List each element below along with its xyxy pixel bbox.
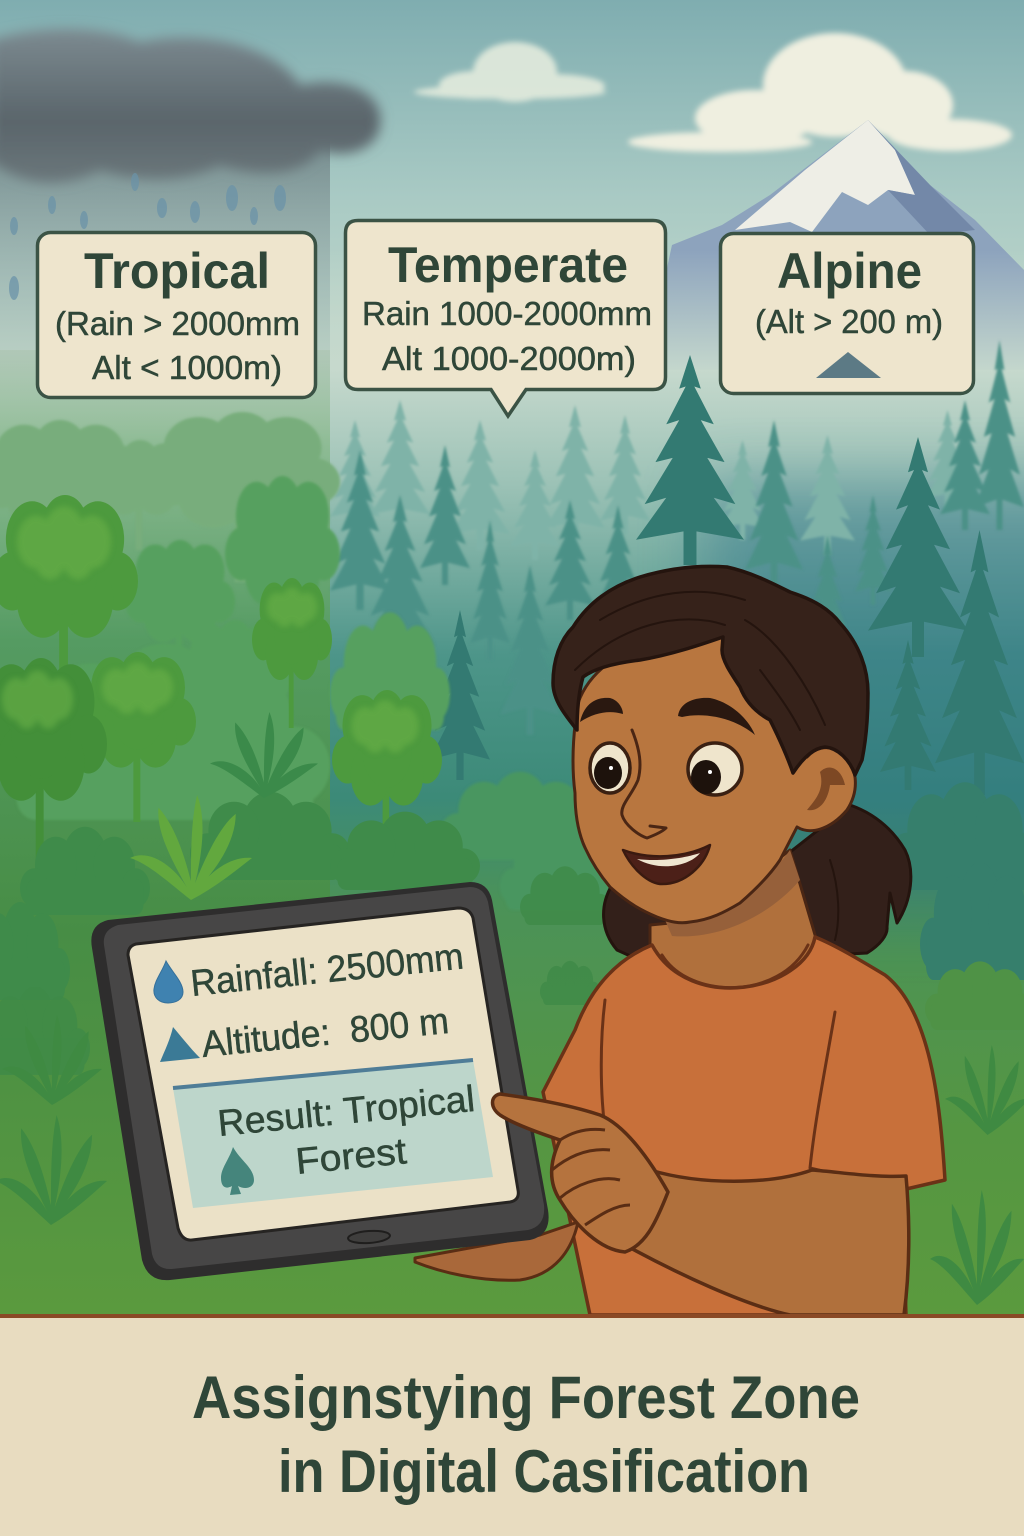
- left eye: [590, 743, 630, 793]
- tablet: Forest: [294, 1130, 409, 1182]
- temperate pines: near layer: [430, 355, 1024, 795]
- fern: bottom left plants: [0, 1015, 107, 1225]
- label: Temperate: Rain 1000-2000mm: [362, 295, 652, 332]
- tablet screen: [128, 908, 518, 1240]
- label: Alpine: [720, 234, 974, 394]
- right eyebrow: [678, 698, 755, 735]
- temperate pines: middle layer: [330, 340, 1024, 735]
- right eye: [688, 743, 742, 795]
- tropical bushes: [0, 792, 480, 1000]
- label: Tropical: (Rain > 2000mm: [55, 305, 300, 342]
- tablet body: [91, 882, 549, 1280]
- label: Alpine: Alpine: [777, 243, 922, 299]
- tropical large foreground tree: [0, 658, 107, 868]
- shirt collar: [662, 945, 808, 988]
- temperate pines: far layer: [330, 400, 970, 560]
- lower right green bushes: [925, 961, 1024, 1030]
- icon: alpine mountain: [816, 352, 881, 378]
- face: [573, 633, 855, 923]
- result text: Result: Tropical: [216, 1078, 477, 1144]
- shirt: [543, 937, 945, 1315]
- mouth: [623, 845, 710, 884]
- label: Temperate: Alt 1000-2000m): [382, 340, 636, 377]
- title banner: [0, 1314, 1024, 1536]
- tropical canopy: near layer: [0, 495, 442, 860]
- background: tropical forest ground: [0, 350, 330, 1320]
- title banner: in Digital Casification: [278, 1438, 810, 1505]
- finger lines: [552, 1129, 630, 1225]
- hair: [553, 566, 868, 775]
- tablet holding hand: [415, 1222, 578, 1280]
- neck shadow: [665, 850, 800, 936]
- mountain mist: [330, 250, 1024, 375]
- nose: [622, 730, 666, 838]
- tablet home button: [348, 1230, 390, 1244]
- rainfall reading: Rainfall: 2500mm: [189, 935, 465, 1004]
- label: Temperate: [346, 220, 666, 416]
- tropical canopy: far layer: [0, 412, 340, 582]
- rain cloud: [0, 29, 380, 182]
- fern: bottom right plants: [930, 1045, 1024, 1305]
- temperate bushes near foreground: [440, 772, 620, 910]
- fern: tropical plant upper: [210, 712, 318, 798]
- cloud: small white cloud: [414, 42, 606, 102]
- temperate blue tint: [700, 480, 1024, 920]
- mountain: [660, 120, 1024, 420]
- arm: [625, 1170, 909, 1315]
- icon: rain drop: [154, 961, 183, 1003]
- character: girl: [415, 566, 945, 1315]
- tropical rain veil: [0, 140, 330, 440]
- tropical canopy: middle fill: [0, 476, 450, 820]
- fern: tropical plant lower: [130, 795, 252, 900]
- neck: [650, 850, 818, 991]
- sky background: [0, 0, 1024, 440]
- shirt sleeve seams: [601, 1000, 902, 1190]
- left eyebrow: [580, 698, 623, 722]
- right edge teal bushes: [890, 782, 1024, 980]
- title text: Assignstying Forest Zone: [192, 1364, 860, 1431]
- lower meadow shrubs: [0, 866, 610, 1075]
- rain drops: [9, 173, 286, 300]
- back hair: [604, 805, 911, 965]
- icon: spade tree: [221, 1147, 254, 1195]
- cloud: large white cloud: [628, 33, 1012, 152]
- result panel: [173, 1060, 493, 1208]
- label: Temperate: Temperate: [388, 237, 628, 293]
- background: temperate forest ground: [330, 370, 1024, 1320]
- altitude reading: Altitude: 800 m: [200, 1000, 451, 1065]
- label: Tropical: [38, 232, 316, 398]
- hair strands: [575, 592, 838, 940]
- label: Tropical: Alt < 1000m): [92, 349, 282, 386]
- pointing hand: [492, 1094, 668, 1252]
- label: Tropical: Tropical: [84, 243, 270, 299]
- tablet: [91, 882, 549, 1280]
- label: Alpine: (Alt > 200 m): [755, 303, 943, 340]
- tree crown highlights: [2, 506, 419, 753]
- icon: altitude triangle: [160, 1027, 200, 1062]
- ear detail: [807, 768, 845, 810]
- teeth: [637, 853, 700, 866]
